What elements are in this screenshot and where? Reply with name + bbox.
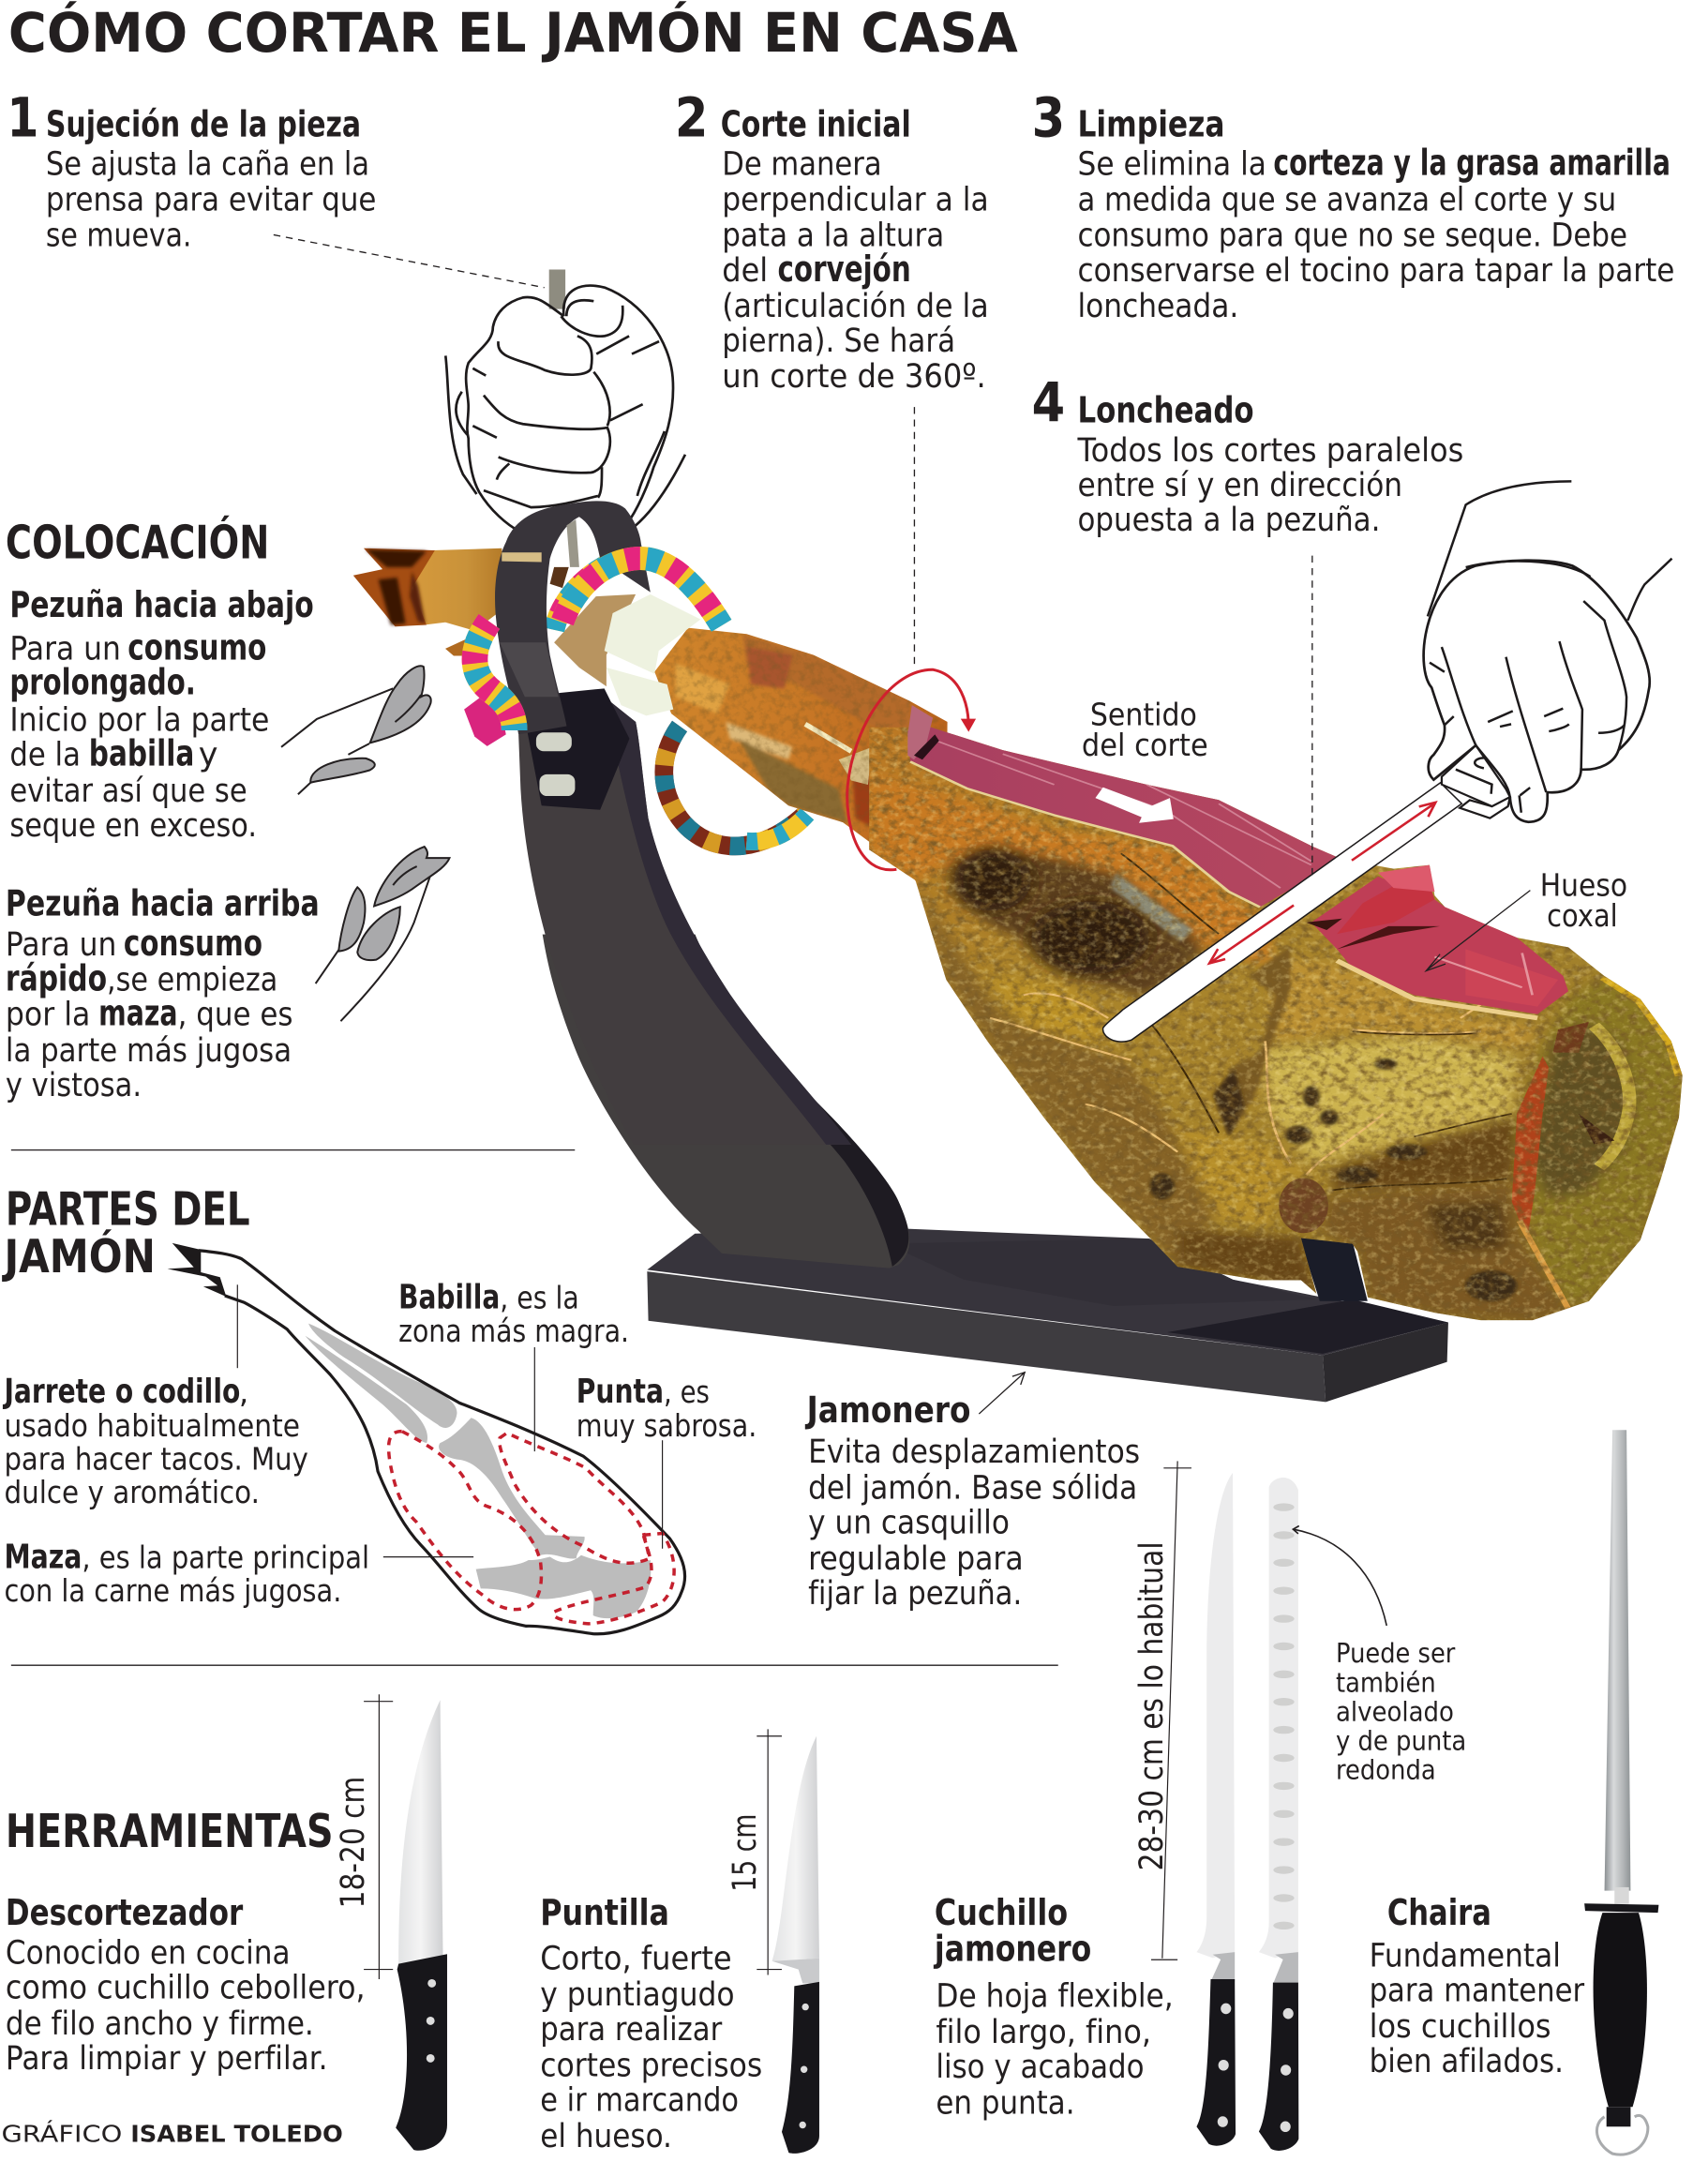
- step 4: Loncheado: [1077, 389, 1254, 431]
- text: puntilla: cortes precisos: [540, 2048, 762, 2085]
- heading: partes del jamón: PARTES DEL: [6, 1183, 250, 1237]
- step 3: Limpieza: [1077, 103, 1225, 145]
- label: sentido del corte: del corte: [1082, 727, 1208, 763]
- text: cuchillo jamonero: en punta.: [936, 2085, 1075, 2123]
- heading: partes del jamón: [2, 1183, 250, 1284]
- text: chaira: los cuchillos: [1370, 2008, 1551, 2046]
- step 2: corvejón: [778, 248, 911, 291]
- text: jamonero: regulable para: [808, 1540, 1024, 1578]
- diagram: ham parts: [168, 1243, 685, 1634]
- text: pezuña hacia abajo: Para un: [9, 631, 121, 668]
- plain blade: [1196, 1473, 1235, 1958]
- text: pezuña hacia abajo: babilla: [89, 732, 194, 774]
- callout: maza: con la carne más jugosa.: [4, 1572, 341, 1609]
- step 1: se mueva.: [46, 217, 191, 254]
- knives: jamonero pair and steel: [1196, 1430, 1658, 2154]
- step 3: a medida que se avanza el corte y su: [1077, 182, 1616, 219]
- step 2: pata a la altura: [722, 217, 944, 254]
- callout: maza: , es la parte principal: [82, 1539, 369, 1575]
- divider: [11, 1664, 1058, 1666]
- rope tail: [464, 622, 515, 746]
- text: descortezador: como cuchillo cebollero,: [6, 1970, 366, 2007]
- text: puntilla: [540, 1892, 762, 2155]
- step 1: Sujeción de la pieza: [46, 103, 361, 145]
- step 3: 3: [1032, 85, 1065, 149]
- text: jamonero: y un casquillo: [808, 1504, 1010, 1541]
- cured meat surface: [907, 728, 1568, 1018]
- text: descortezador: Para limpiar y perfilar.: [6, 2040, 328, 2078]
- text: chaira: para mantener: [1370, 1973, 1585, 2010]
- red rotation arrow: [847, 669, 976, 870]
- text: descortezador: Descortezador: [6, 1892, 243, 1934]
- text: descortezador: [6, 1892, 366, 2078]
- text: chaira: Chaira: [1387, 1892, 1491, 1934]
- text: jamonero: [804, 1373, 1140, 1613]
- callout: jarrete: Jarrete o codillo: [3, 1373, 240, 1411]
- callout: punta: muy sabrosa.: [577, 1407, 757, 1444]
- dashed leader lines: [274, 234, 1312, 878]
- text: cuchillo jamonero: [933, 1892, 1174, 2123]
- text: jamonero: Jamonero: [804, 1389, 970, 1432]
- text: pezuña hacia arriba: y vistosa.: [6, 1067, 142, 1104]
- sharpening steel: [1605, 1430, 1630, 1891]
- text: pezuña hacia abajo: evitar así que se: [9, 773, 247, 810]
- text: cuchillo jamonero: filo largo, fino,: [936, 2014, 1151, 2051]
- text: chaira: bien afilados.: [1370, 2043, 1564, 2080]
- ruler: 18-20 cm: [335, 1694, 393, 1979]
- step 2: De manera: [722, 146, 882, 184]
- heading: partes del jamón: JAMÓN: [2, 1228, 156, 1284]
- credit: GRÁFICO: [1, 2120, 122, 2147]
- step 2: pierna). Se hará: [722, 323, 955, 360]
- text: jamonero: Evita desplazamientos: [808, 1434, 1140, 1471]
- text: puntilla: el hueso.: [540, 2118, 672, 2155]
- callout: punta: Punta: [577, 1373, 664, 1411]
- clamp strap: [495, 501, 651, 734]
- text: pezuña hacia abajo: consumo: [127, 627, 266, 669]
- text: puntilla: Puntilla: [540, 1892, 669, 1934]
- heading: herramientas: HERRAMIENTAS: [6, 1805, 334, 1858]
- callout: jarrete: para hacer tacos. Muy: [4, 1440, 308, 1477]
- step 2: (articulación de la: [722, 288, 989, 325]
- callout: punta: [577, 1373, 757, 1549]
- ruler: 28-30 cm: [1133, 1461, 1191, 1959]
- stand base and lower arm: [543, 935, 1448, 1402]
- step 4: entre sí y en dirección: [1077, 467, 1402, 504]
- step 1: prensa para evitar que: [46, 182, 376, 219]
- hoof: [410, 548, 504, 631]
- text: pezuña hacia abajo: Inicio por la parte: [9, 701, 269, 739]
- step 1: 1: [7, 85, 38, 149]
- text: descortezador: de filo ancho y firme.: [6, 2005, 314, 2043]
- text: descortezador: Conocido en cocina: [6, 1935, 291, 1973]
- step 1: [7, 85, 376, 254]
- bolts: [536, 732, 572, 751]
- heading: colocación: COLOCACIÓN: [6, 515, 269, 570]
- knife: descortezador: [396, 1700, 447, 2151]
- text: puntilla: e ir marcando: [540, 2082, 739, 2120]
- text: cuchillo jamonero: jamonero: [933, 1929, 1091, 1971]
- stand upper arm, hoof, leg: [353, 548, 956, 1145]
- text: puntilla: y puntiagudo: [540, 1976, 735, 2014]
- callout: babilla: Babilla: [398, 1278, 500, 1316]
- step 2: perpendicular a la: [722, 182, 989, 219]
- text: pezuña hacia abajo: y: [199, 736, 218, 773]
- text: pezuña hacia arriba: consumo: [124, 923, 262, 965]
- callout: jarrete: ,: [239, 1374, 248, 1410]
- label: hueso coxal: coxal: [1547, 897, 1618, 934]
- text: pezuña hacia arriba: Pezuña hacia arriba: [6, 882, 320, 924]
- text: cuchillo jamonero: liso y acabado: [936, 2049, 1145, 2086]
- text: pezuña hacia arriba: por la: [6, 996, 90, 1033]
- text: cuchillo jamonero: Cuchillo: [935, 1892, 1068, 1934]
- ruler: 15 cm: [727, 1729, 782, 1975]
- text: pezuña hacia arriba: , que es: [178, 996, 293, 1033]
- text: pezuña hacia arriba: rápido: [6, 957, 107, 999]
- callout: jarrete: usado habitualmente: [4, 1407, 300, 1444]
- step 2: Corte inicial: [721, 103, 911, 145]
- arrow: sentido del corte: [1095, 788, 1174, 823]
- bones: [306, 1324, 651, 1618]
- text: pezuña hacia abajo: de la: [9, 736, 81, 773]
- note: alveolado: también: [1336, 1666, 1436, 1698]
- ham body photo: [864, 724, 1697, 1324]
- text: pezuña hacia abajo: [9, 584, 314, 845]
- step 4: 4: [1032, 370, 1065, 434]
- leg: [654, 628, 948, 881]
- callout: jarrete: [3, 1284, 308, 1510]
- step 2: del: [722, 252, 768, 290]
- divider: [11, 1149, 575, 1151]
- step 3: consumo para que no se seque. Debe: [1077, 217, 1627, 254]
- red dashed zones: [389, 1432, 674, 1624]
- scalloped blade: [1259, 1478, 1298, 1958]
- note: alveolado: redonda: [1336, 1754, 1436, 1786]
- credit: ISABEL TOLEDO: [130, 2120, 343, 2147]
- credit: [1, 2120, 343, 2147]
- text: chaira: Fundamental: [1370, 1938, 1561, 1975]
- label: hueso coxal: Hueso: [1540, 867, 1627, 904]
- step 3: Se elimina la: [1077, 146, 1266, 184]
- white wrap: [605, 594, 700, 674]
- knife: puntilla: [772, 1736, 819, 2154]
- clamp plate: [520, 688, 629, 810]
- text: pezuña hacia abajo: prolongado.: [9, 662, 196, 704]
- callout: babilla: , es la: [500, 1279, 579, 1315]
- rope back strand: [554, 559, 622, 630]
- step 2: un corte de 360º.: [722, 358, 986, 396]
- note: alveolado: y de punta: [1336, 1725, 1466, 1757]
- text: puntilla: Corto, fuerte: [540, 1941, 732, 1978]
- icon: hand with hoof up: [316, 847, 449, 1021]
- knuckle: [1604, 976, 1682, 1075]
- text: pezuña hacia arriba: la parte más jugosa: [6, 1032, 292, 1070]
- cut wall, wrap, rope and clamp: [281, 501, 939, 1021]
- hoof: [168, 1243, 226, 1297]
- text: pezuña hacia arriba: ,se empieza: [107, 961, 277, 998]
- callout: babilla: [398, 1278, 629, 1451]
- knife guard: [1460, 797, 1510, 818]
- note: alveolado: [1336, 1637, 1466, 1786]
- rope upper: [562, 559, 722, 625]
- step 2: 2: [675, 85, 708, 149]
- ruler: 18-20 cm: 18-20 cm: [335, 1777, 372, 1908]
- cutting hand: [1424, 481, 1671, 822]
- text: pezuña hacia arriba: [6, 882, 320, 1104]
- rope lower loop: [664, 726, 807, 846]
- step 2: [675, 85, 989, 396]
- text: pezuña hacia arriba: maza: [98, 992, 178, 1034]
- step 3: [1032, 85, 1674, 325]
- callout: punta: , es: [664, 1374, 710, 1410]
- title: CÓMO CORTAR EL JAMÓN EN CASA: [8, 1, 1018, 65]
- step 4: Todos los cortes paralelos: [1077, 432, 1463, 470]
- text: pezuña hacia abajo: Pezuña hacia abajo: [9, 584, 314, 626]
- icon: hand holding the hock: [445, 269, 685, 532]
- skin folds and veins: [990, 987, 1506, 1175]
- callout: babilla: zona más magra.: [398, 1313, 629, 1349]
- label: sentido del corte: Sentido: [1090, 696, 1197, 732]
- step 3: loncheada.: [1077, 288, 1238, 325]
- text: pezuña hacia arriba: Para un: [6, 926, 116, 964]
- ruler: 15 cm: 15 cm: [727, 1814, 764, 1892]
- arrow to blade: [1293, 1525, 1386, 1626]
- handle: [1196, 1979, 1236, 2146]
- step 4: [1032, 370, 1463, 539]
- text: cuchillo jamonero: De hoja flexible,: [936, 1978, 1174, 2016]
- knife blade and arrows: [1103, 783, 1461, 1042]
- step 4: opuesta a la pezuña.: [1077, 502, 1380, 539]
- ruler: 28-30 cm: 28-30 cm es lo habitual: [1133, 1541, 1171, 1870]
- text: puntilla: para realizar: [540, 2011, 723, 2049]
- note: alveolado: Puede ser: [1336, 1637, 1456, 1669]
- stand arm upper: [518, 697, 851, 1145]
- text: jamonero: del jamón. Base sólida: [808, 1469, 1137, 1507]
- label: hueso coxal: [1426, 867, 1627, 971]
- text: chaira: [1370, 1892, 1585, 2080]
- label: sentido del corte: [1082, 696, 1208, 763]
- callout: jarrete: dulce y aromático.: [4, 1474, 260, 1510]
- step 1: Se ajusta la caña en la: [46, 146, 369, 184]
- note: alveolado: alveolado: [1336, 1695, 1454, 1727]
- text: pezuña hacia abajo: seque en exceso.: [9, 807, 257, 845]
- tan wrap section: [554, 594, 636, 686]
- text: jamonero: fijar la pezuña.: [808, 1575, 1022, 1613]
- callout: maza: Maza: [4, 1538, 82, 1576]
- callout: maza: [4, 1538, 473, 1609]
- icon: hand with hoof down: [281, 666, 431, 794]
- silhouette: [199, 1251, 685, 1634]
